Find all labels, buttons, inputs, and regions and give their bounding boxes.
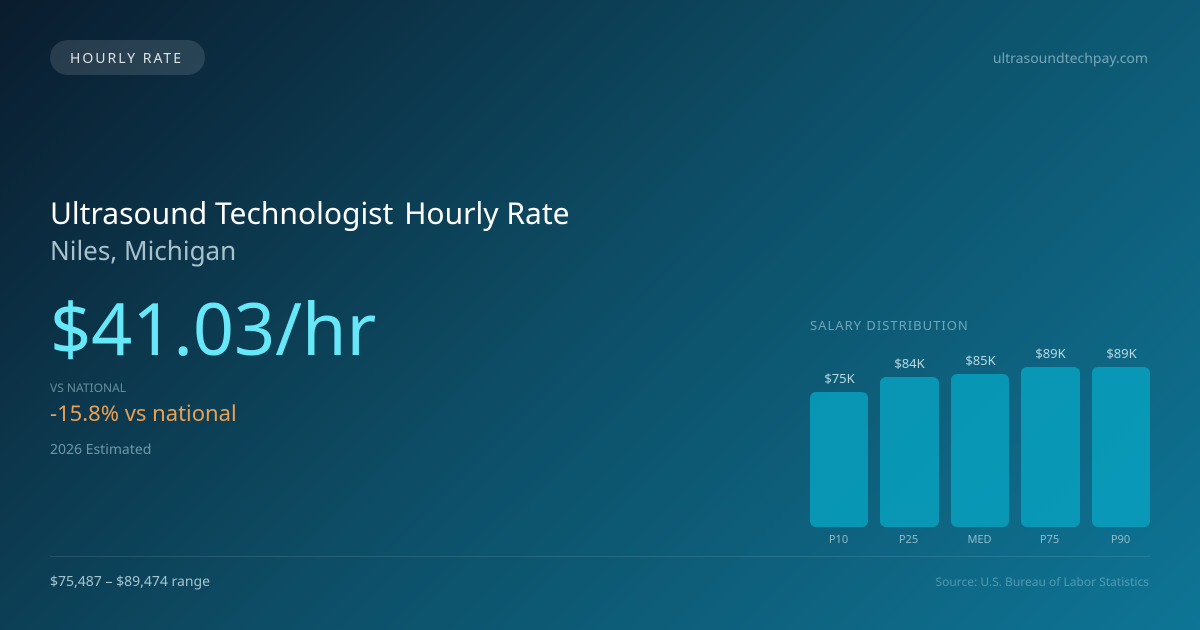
axis label P75: P75 (1040, 532, 1059, 547)
hourly rate value: $41.03/hr (50, 279, 376, 377)
badge: hourly rate: HOURLY RATE (70, 49, 183, 68)
source: Source: U.S. Bureau of Labor Statistics (936, 573, 1149, 590)
chart heading: SALARY DISTRIBUTION (810, 316, 969, 334)
axis label P10: P10 (829, 532, 848, 547)
salary range: $75,487 – $89,474 range (50, 572, 210, 591)
axis label median: MED (967, 532, 992, 547)
comparison value: -15.8% vs national (50, 398, 237, 428)
bar P25 (880, 377, 939, 527)
axis label P90: P90 (1111, 532, 1130, 547)
value P90: $89K (1106, 344, 1137, 362)
value P10: $75K (824, 369, 855, 387)
value median: $85K (965, 351, 996, 369)
comparison label: VS NATIONAL (50, 379, 126, 396)
estimate year: 2026 Estimated (50, 440, 151, 459)
value P25: $84K (894, 354, 925, 372)
bar P75 (1021, 367, 1080, 527)
axis label P25: P25 (899, 532, 918, 547)
subtitle: location: Niles, Michigan (50, 232, 236, 268)
bar P10 (810, 392, 868, 527)
bar P90 (1092, 367, 1150, 527)
badge: hourly rate (50, 40, 205, 75)
bar median (951, 374, 1009, 527)
value P75: $89K (1035, 344, 1066, 362)
site domain: ultrasoundtechpay.com (993, 49, 1148, 68)
title: Ultrasound Technologist Hourly Rate (50, 192, 570, 233)
